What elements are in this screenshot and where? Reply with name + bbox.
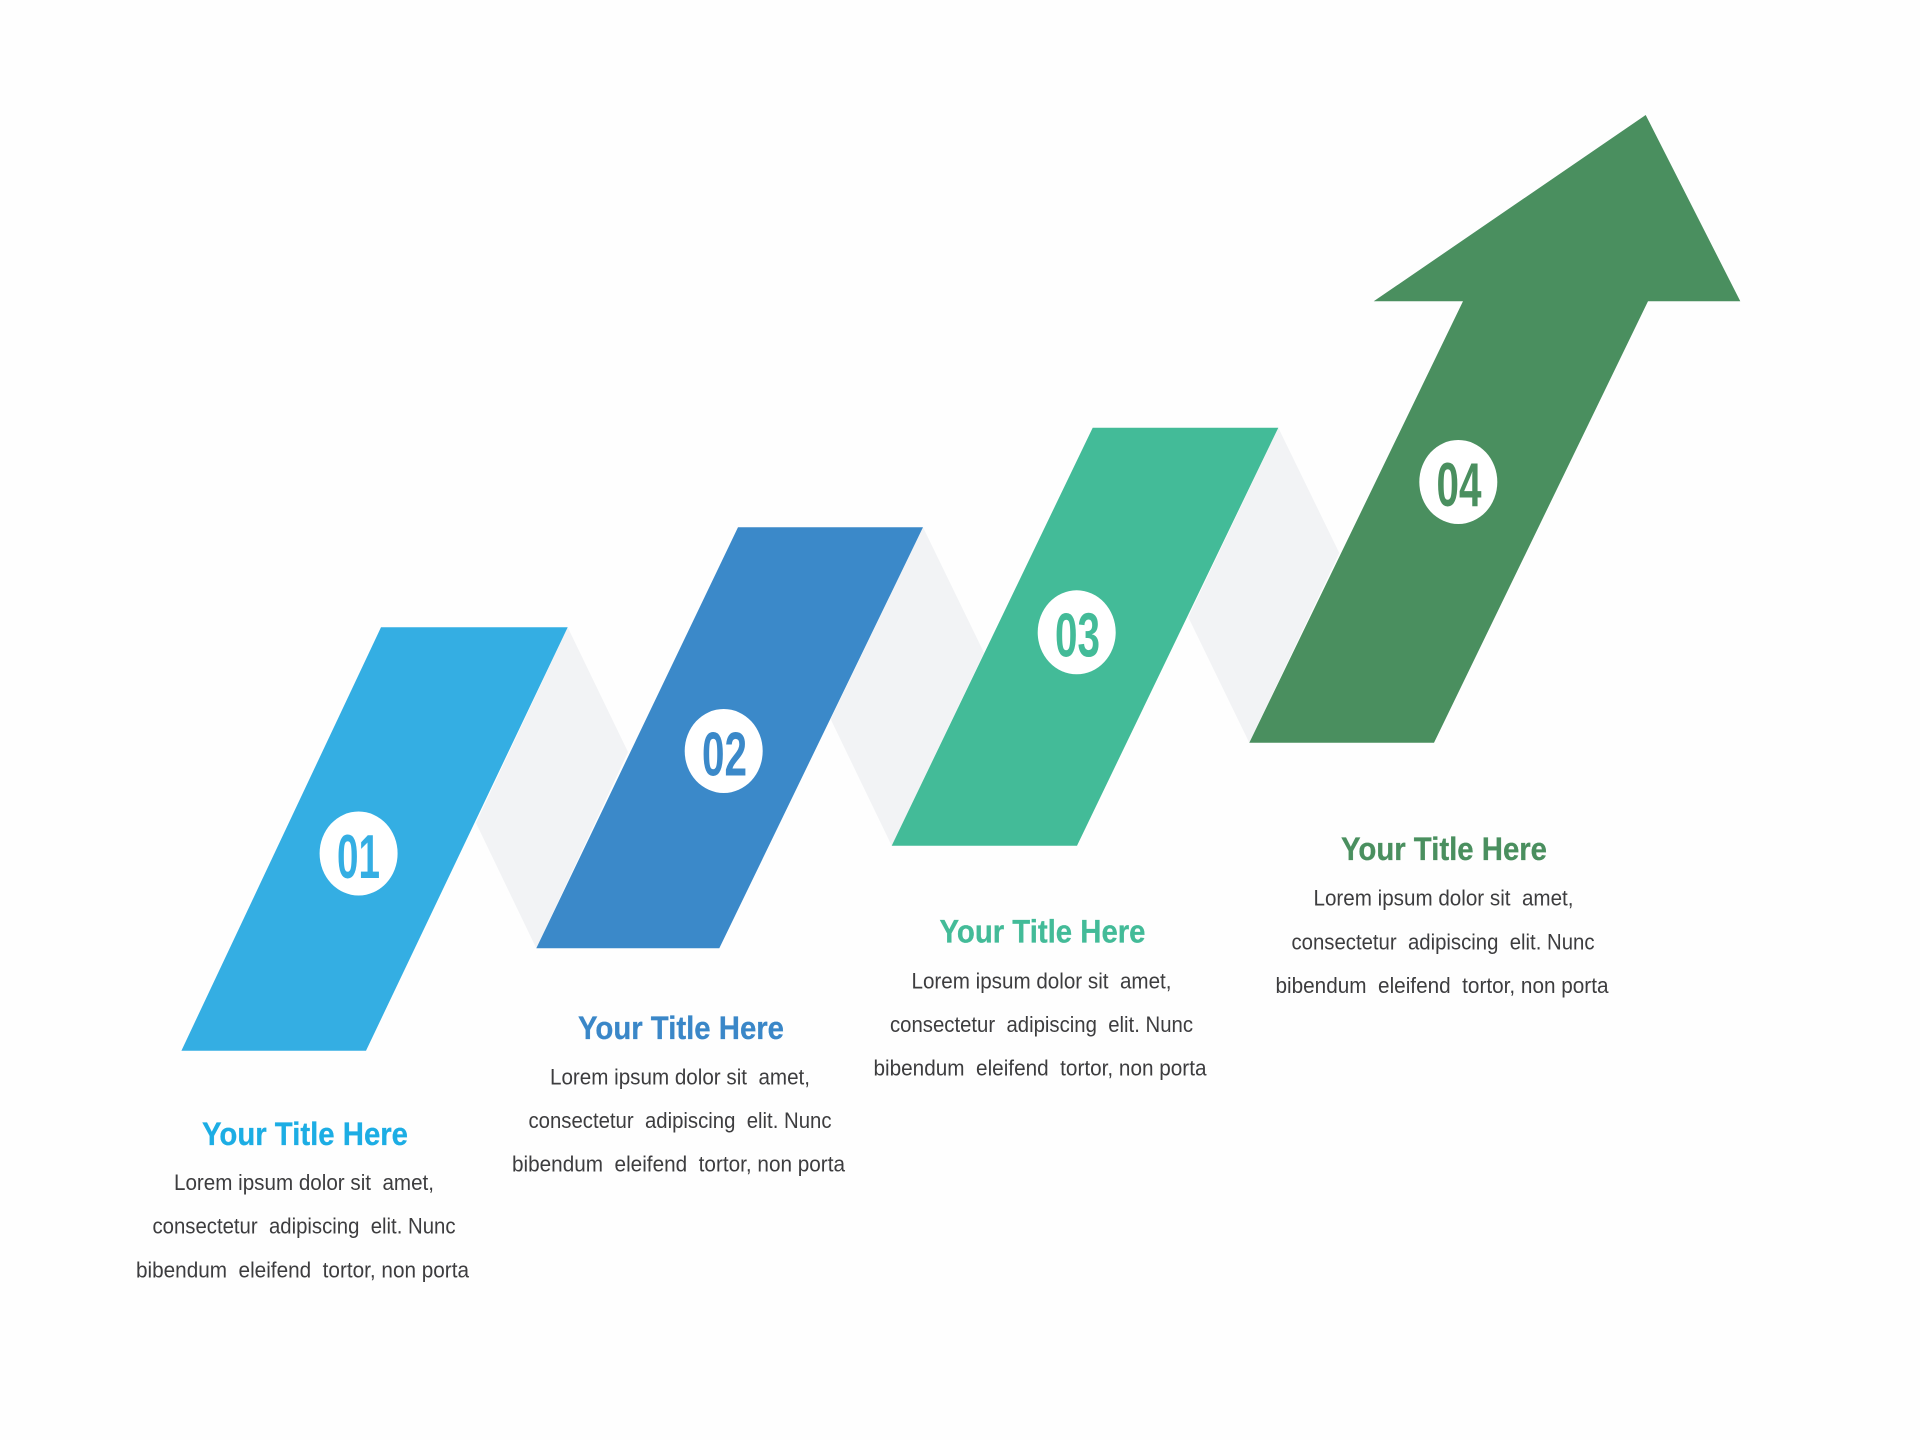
heading 02: Your Title Here	[578, 1010, 784, 1046]
text block: step 01	[136, 1116, 470, 1282]
arrow: upward growth	[1249, 115, 1740, 743]
panel: step 01 ribbon	[181, 627, 568, 1051]
heading 04: Your Title Here	[1341, 831, 1547, 867]
text block: step 03	[874, 914, 1207, 1081]
body text 01	[136, 1170, 470, 1282]
heading 01: Your Title Here	[202, 1116, 408, 1152]
body text 04: bibendum eleifend tortor, non porta	[1276, 973, 1609, 998]
body text 04	[1276, 886, 1609, 998]
connector fold: step 1 to step 2	[476, 627, 628, 948]
heading 03: Your Title Here	[940, 914, 1146, 950]
text block: step 04	[1276, 831, 1609, 998]
body text 03: bibendum eleifend tortor, non porta	[874, 1056, 1207, 1081]
connector fold: step 3 to step 4	[1188, 428, 1339, 743]
ribbon segment 03	[892, 428, 1278, 846]
text block: step 02	[512, 1010, 846, 1176]
body text 02	[512, 1064, 846, 1176]
body text 03: Lorem ipsum dolor sit amet,	[912, 968, 1172, 993]
number badge 01	[320, 812, 398, 896]
number badge 04: 04	[1436, 451, 1482, 520]
panel: step 02 ribbon	[536, 527, 923, 948]
body text 01: consectetur adipiscing elit. Nunc	[152, 1214, 456, 1239]
body text 04: Lorem ipsum dolor sit amet,	[1314, 886, 1574, 910]
body text 03: consectetur adipiscing elit. Nunc	[890, 1012, 1193, 1037]
number badge 03: 03	[1055, 602, 1100, 670]
body text 02: consectetur adipiscing elit. Nunc	[528, 1108, 832, 1133]
body text 02: Lorem ipsum dolor sit amet,	[550, 1064, 810, 1089]
number badge 04	[1419, 440, 1497, 524]
number badge 02	[685, 709, 763, 793]
body text 04: consectetur adipiscing elit. Nunc	[1292, 929, 1594, 954]
body text 01: Lorem ipsum dolor sit amet,	[174, 1170, 434, 1195]
number badge 01: 01	[337, 823, 380, 892]
ribbon segment 01	[181, 627, 568, 1051]
body text 01: bibendum eleifend tortor, non porta	[136, 1257, 470, 1282]
number badge 03	[1038, 590, 1116, 674]
panel: step 03 ribbon	[892, 428, 1278, 846]
panel: step 04 arrow	[1249, 115, 1740, 743]
body text 03	[874, 968, 1207, 1081]
connector fold: step 2 to step 3	[831, 527, 984, 846]
number badge 02: 02	[702, 720, 747, 790]
ribbon segment 02	[536, 527, 923, 948]
body text 02: bibendum eleifend tortor, non porta	[512, 1151, 846, 1176]
